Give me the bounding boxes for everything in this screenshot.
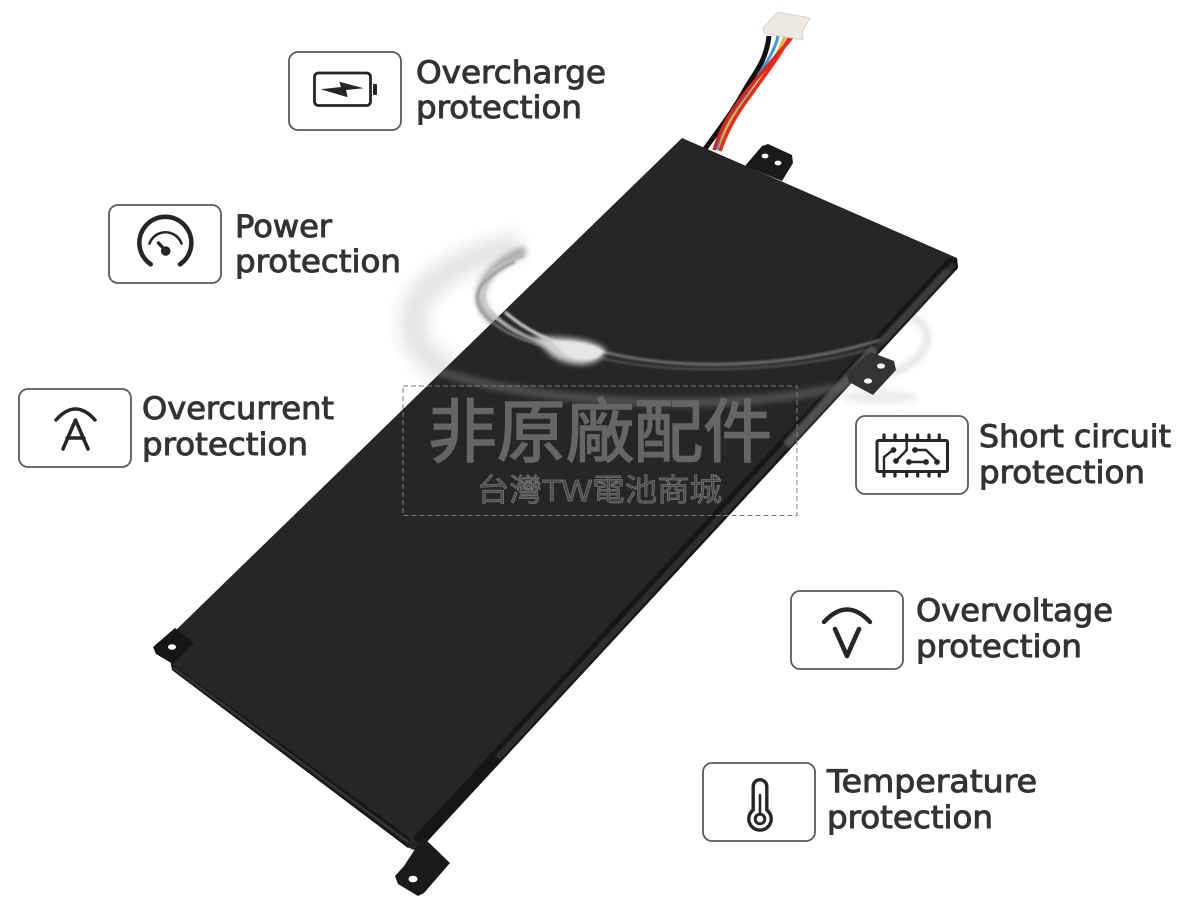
tab: middle xyxy=(847,352,896,395)
item: overcharge protection xyxy=(289,52,606,130)
label: overcharge xyxy=(416,55,606,126)
label: power xyxy=(235,209,401,280)
icon box: power xyxy=(109,205,221,283)
label: overcurrent: protection xyxy=(142,427,308,463)
label: overcharge: Overcharge xyxy=(416,55,606,91)
swirl halo on background xyxy=(412,245,927,404)
icon: ampere arc xyxy=(56,409,95,449)
item: overvoltage protection xyxy=(791,591,1113,669)
label: short circuit xyxy=(979,419,1171,491)
label: power: Power xyxy=(235,209,332,245)
label: overcharge: protection xyxy=(416,90,582,126)
label: short circuit: Short circuit xyxy=(979,419,1171,455)
item: power protection xyxy=(109,205,401,283)
icon: circuit chip xyxy=(877,435,948,476)
swirl over battery xyxy=(430,268,952,448)
label: short circuit: protection xyxy=(979,455,1145,491)
label: overvoltage: protection xyxy=(916,629,1082,665)
watermark sub text: 台灣TW電池商城 xyxy=(477,473,722,508)
label: overvoltage: Overvoltage xyxy=(916,593,1113,629)
label: overcurrent xyxy=(142,391,334,463)
label: overcurrent: Overcurrent xyxy=(142,391,334,427)
label: power: protection xyxy=(235,244,401,280)
label: temperature: Temperature xyxy=(826,764,1037,800)
icon: thermometer xyxy=(749,780,771,830)
item: overcurrent protection xyxy=(19,389,334,467)
label: temperature: protection xyxy=(827,800,993,836)
icon box: overcurrent xyxy=(19,389,131,467)
icon box: temperature xyxy=(703,763,815,841)
watermark main text: 非原廠配件 xyxy=(428,394,772,471)
item: short circuit protection xyxy=(856,416,1171,494)
icon box: overvoltage xyxy=(791,591,903,669)
wiring harness and connector xyxy=(705,12,810,151)
bottom fold edge xyxy=(172,664,410,848)
tab: top xyxy=(745,144,793,181)
icon box: overcharge xyxy=(289,52,401,130)
label: overvoltage xyxy=(916,593,1113,665)
icon: battery with bolt xyxy=(314,73,377,106)
icon: gauge xyxy=(139,217,191,264)
right fold edge xyxy=(413,258,958,846)
watermark xyxy=(403,386,797,516)
icon box: short circuit xyxy=(856,416,968,494)
tab: left corner xyxy=(153,628,194,664)
tab: bottom corner xyxy=(395,837,450,896)
icon: voltage arc xyxy=(824,610,870,656)
battery body xyxy=(170,138,958,850)
swirl bright streak xyxy=(477,255,606,364)
label: temperature xyxy=(826,764,1037,836)
item: temperature protection xyxy=(703,763,1037,841)
